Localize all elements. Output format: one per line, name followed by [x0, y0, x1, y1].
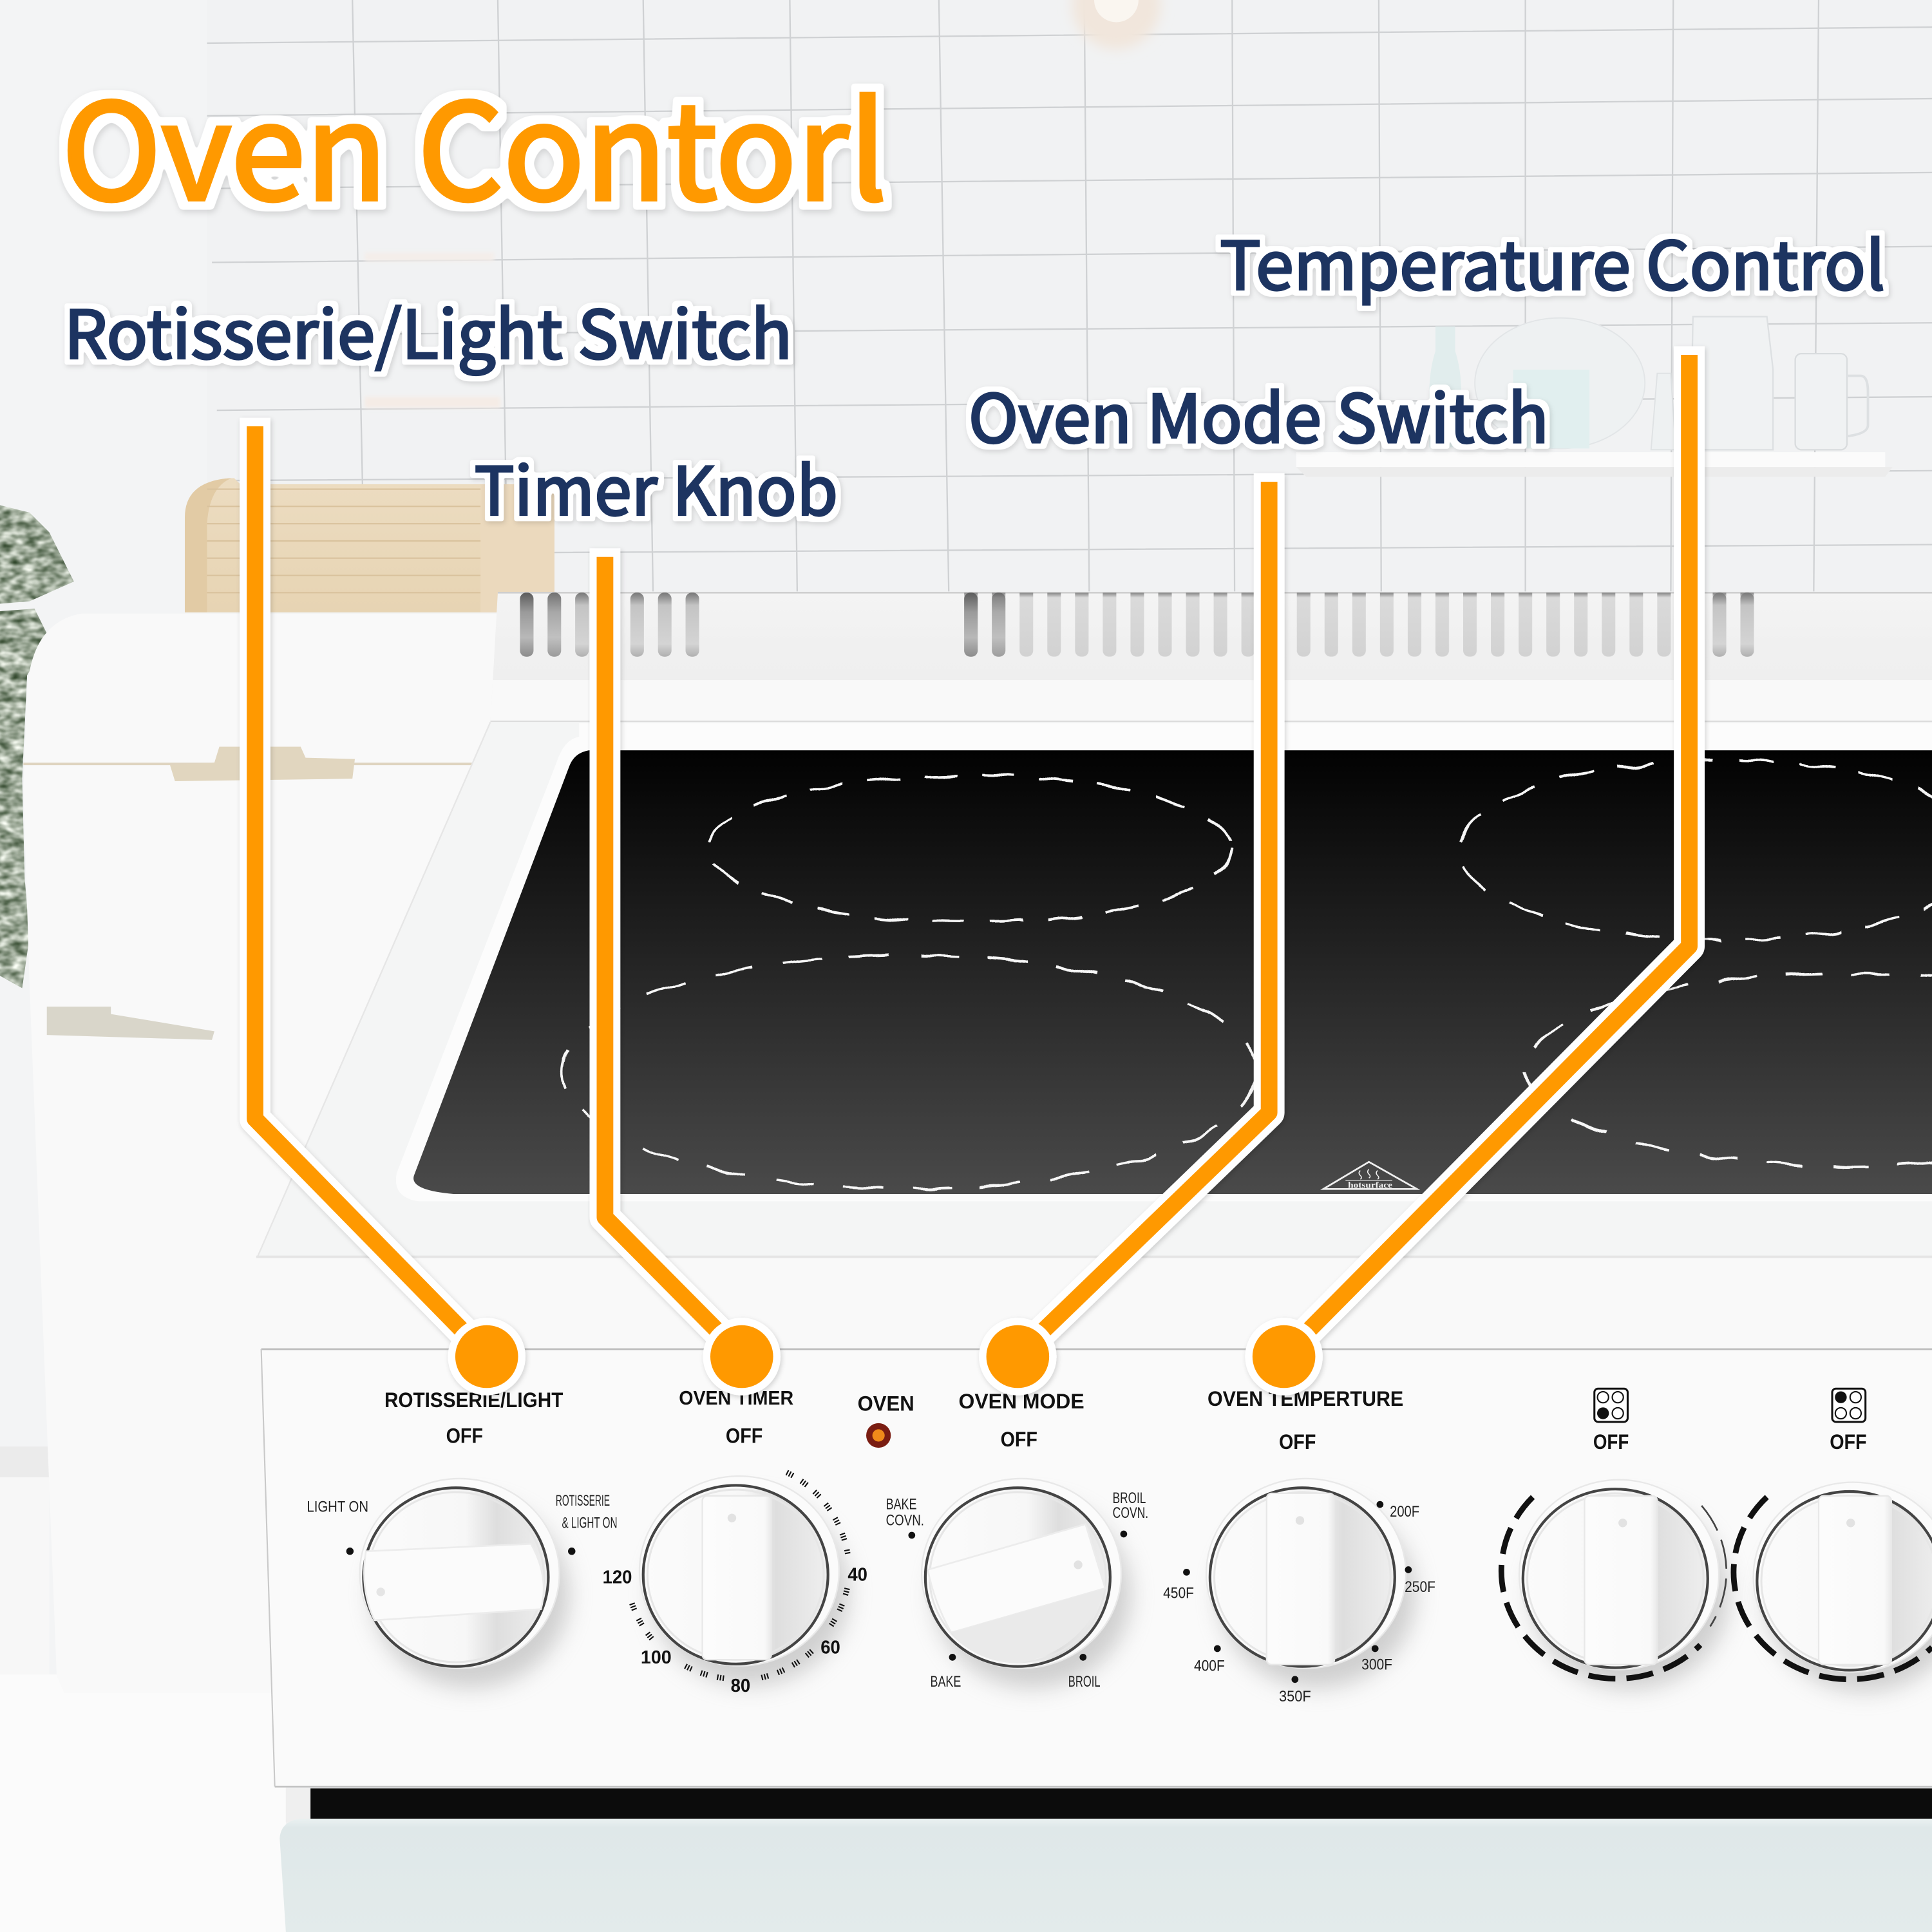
title: Oven Contorl — [62, 45, 887, 238]
panel label: rotisserie/light: ROTISSERIE — [556, 1492, 610, 1510]
glass cooktop with burners — [413, 750, 1932, 1194]
panel label: oven timer: 60 — [820, 1638, 840, 1658]
oven indicator light — [858, 1392, 914, 1448]
knob: oven timer — [639, 1476, 849, 1685]
refrigerator — [23, 614, 498, 1693]
dashed heat arc — [1501, 1497, 1700, 1679]
label: burner off left: OFF — [1593, 1430, 1629, 1454]
hot surface sign — [1323, 1162, 1417, 1189]
label: burner off right: OFF — [1830, 1430, 1867, 1454]
knob: burner right — [1734, 1482, 1932, 1692]
knob: burner left — [1501, 1480, 1728, 1689]
panel label: oven mode: COVN. — [1113, 1504, 1148, 1522]
panel label: oven timer: 100 — [641, 1647, 672, 1668]
panel label: oven temperature: OFF — [1279, 1430, 1316, 1454]
oven indicator light: OVEN — [858, 1392, 914, 1416]
icon: burner selector left — [1595, 1388, 1627, 1422]
panel label: oven temperature: OVEN TEMPERTURE — [1208, 1387, 1403, 1410]
oven door — [279, 1788, 1932, 1932]
floor and side wall — [0, 1446, 50, 1477]
panel label: oven timer: 80 — [731, 1676, 750, 1696]
timer ticks — [630, 1472, 848, 1678]
panel label: oven mode: BROIL — [1068, 1673, 1101, 1690]
heading: timer knob: Timer Knob — [475, 438, 838, 535]
panel label: oven timer: 40 — [848, 1565, 867, 1586]
burner: rear left — [707, 775, 1232, 923]
panel label: oven mode: BAKE — [931, 1673, 961, 1690]
panel label: rotisserie/light: & LIGHT ON — [562, 1514, 618, 1531]
panel label: rotisserie/light: ROTISSERIE/LIGHT — [384, 1388, 563, 1412]
panel label: oven timer — [603, 1387, 867, 1696]
panel label: rotisserie/light: LIGHT ON — [307, 1499, 368, 1516]
panel label: oven temperature: 200F — [1390, 1503, 1419, 1520]
panel label: oven temperature: 400F — [1194, 1657, 1225, 1674]
panel label: rotisserie/light: OFF — [446, 1424, 483, 1447]
panel label: oven temperature: 250F — [1405, 1578, 1435, 1596]
panel label: oven temperature: 350F — [1279, 1688, 1311, 1705]
bread box — [185, 478, 554, 612]
burner: rear right — [1459, 760, 1932, 940]
shelf with glassware — [1296, 317, 1893, 477]
dashed heat arc — [1734, 1497, 1932, 1680]
stove backguard with vents — [490, 592, 1932, 722]
panel label: oven timer: 120 — [603, 1567, 632, 1588]
panel label: oven mode: COVN. — [886, 1512, 924, 1530]
knob: oven mode — [922, 1479, 1131, 1688]
panel label: oven mode — [886, 1390, 1148, 1690]
heading: temperature control: Temperature Control — [1220, 213, 1885, 309]
leader: rotisserie/light switch — [255, 418, 522, 1392]
panel label: oven timer: OFF — [726, 1424, 762, 1447]
plant leaves — [0, 505, 74, 988]
leader: temperature control — [1249, 346, 1689, 1392]
hot surface sign: hotsurface — [1348, 1180, 1392, 1189]
panel label: oven mode: BROIL — [1113, 1490, 1146, 1507]
panel label: oven mode: BAKE — [886, 1496, 916, 1513]
heading: rotisserie/light switch: Rotisserie/Light Switch — [64, 281, 792, 378]
panel label: oven temperature: 450F — [1163, 1585, 1194, 1602]
panel label: oven temperature — [1163, 1387, 1435, 1705]
thin heat arc: burner left — [1701, 1506, 1727, 1627]
leader: timer knob — [605, 548, 777, 1392]
knob: oven temperature — [1206, 1479, 1416, 1688]
leader: oven mode switch — [983, 473, 1269, 1392]
vent slots: right group — [964, 592, 1754, 657]
panel label: oven mode: OFF — [1001, 1428, 1037, 1451]
cooktop surface — [256, 722, 1932, 1258]
icon: burner selector right — [1832, 1388, 1866, 1422]
panel label: oven mode: OVEN MODE — [959, 1390, 1084, 1413]
panel label: oven timer: OVEN TIMER — [679, 1387, 793, 1409]
panel label: oven temperature: 300F — [1361, 1656, 1392, 1673]
knob: rotisserie/light — [360, 1479, 569, 1688]
burner: front right — [1526, 973, 1932, 1166]
heading: oven mode switch: Oven Mode Switch — [969, 365, 1549, 462]
control panel fascia — [256, 1256, 1932, 1786]
panel label: rotisserie/light — [307, 1388, 618, 1555]
vent slots: left group — [520, 592, 699, 657]
burner: front left — [562, 955, 1257, 1189]
